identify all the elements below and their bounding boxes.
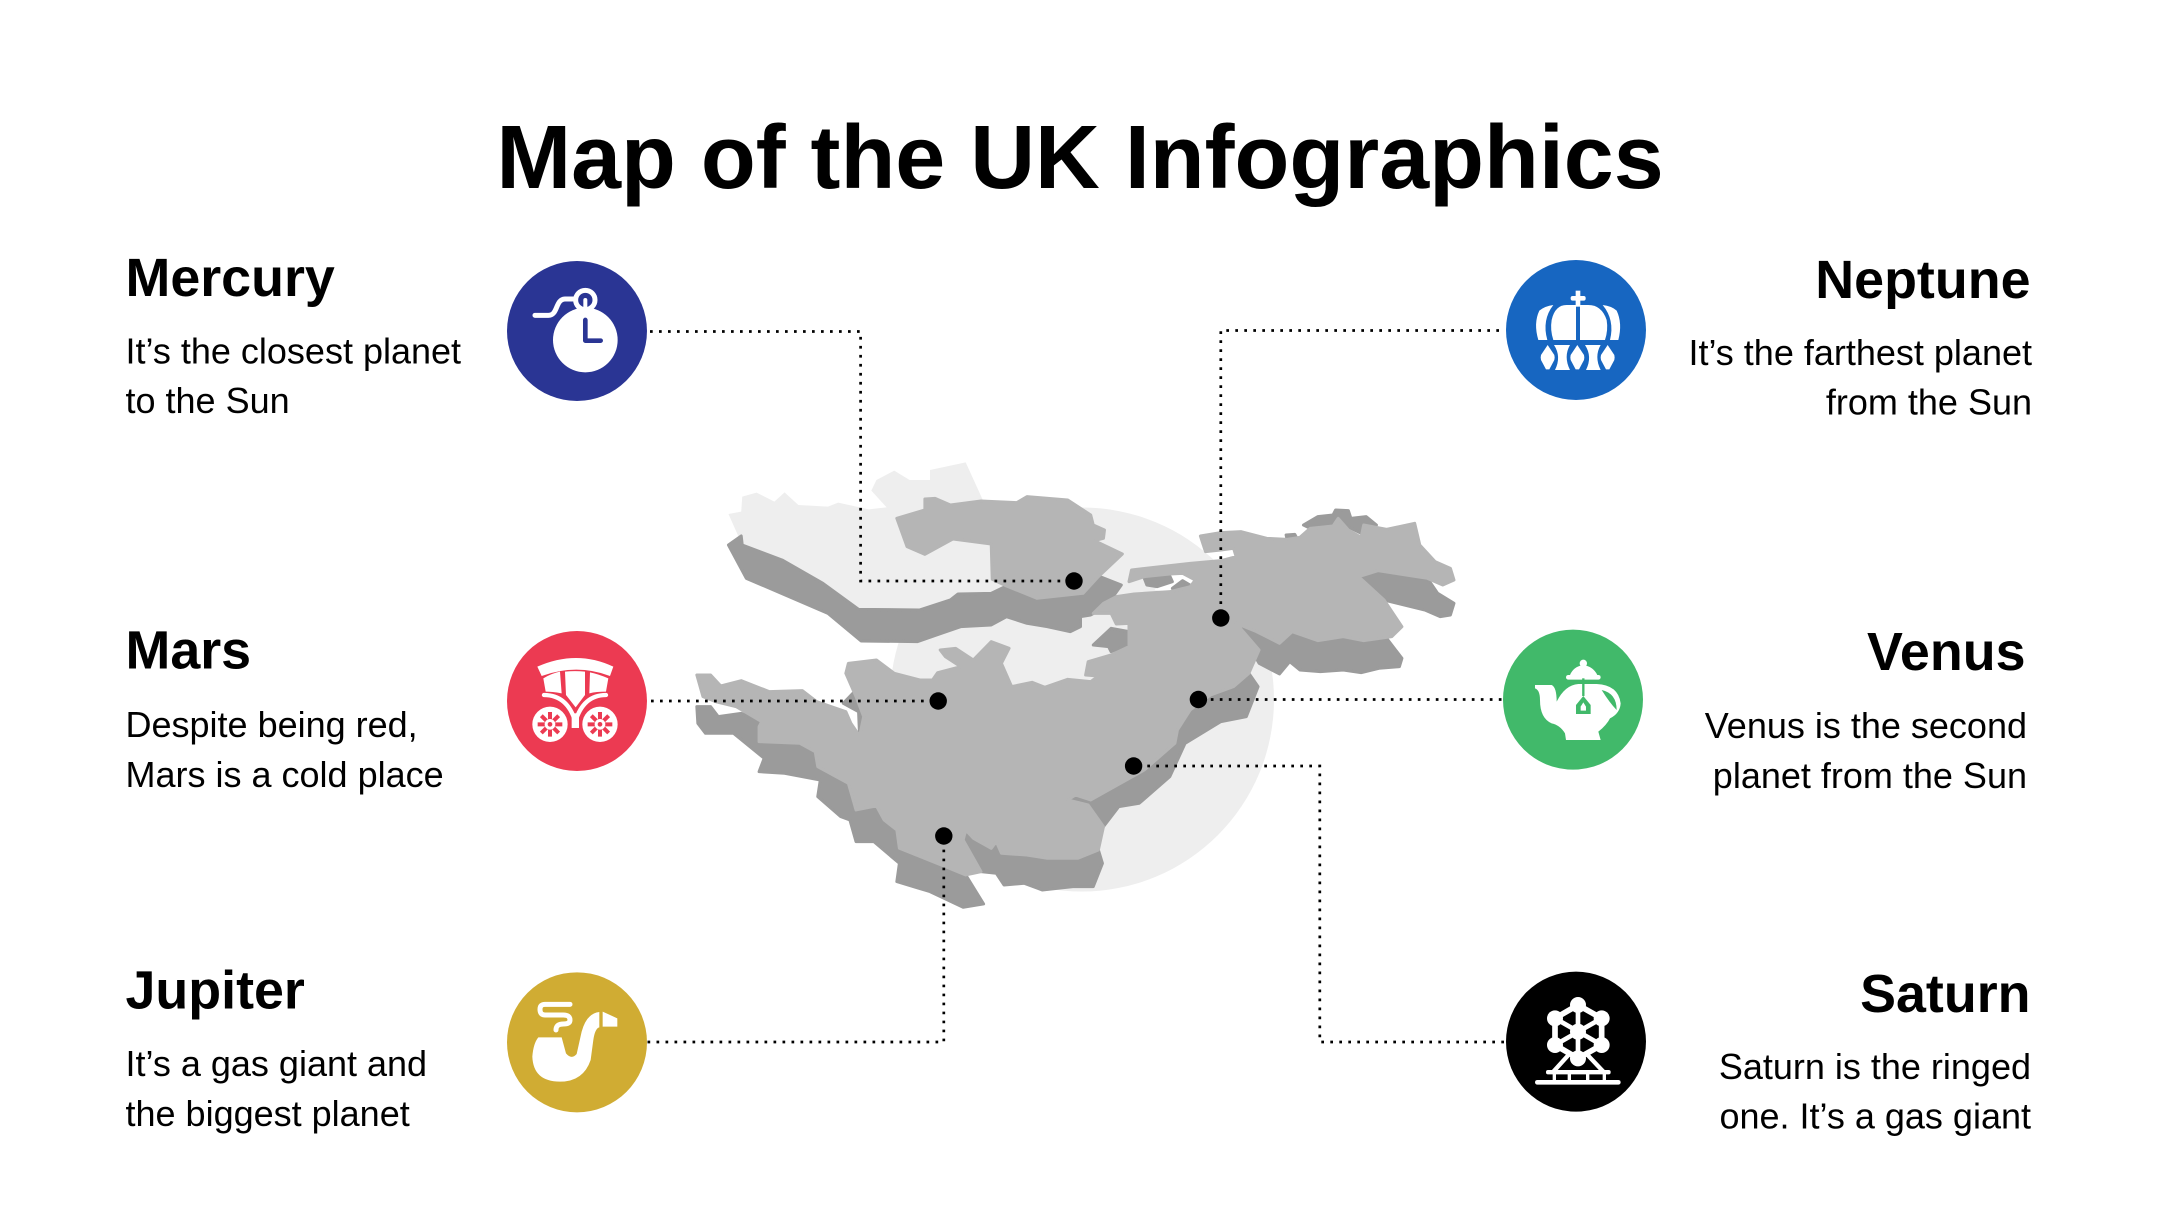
map marker dots: [930, 572, 1230, 845]
icon: teapot: [1503, 630, 1643, 770]
text: Neptune description: from the Sun: [1826, 382, 2032, 422]
heading: Mercury: Mercury: [126, 248, 335, 308]
icon: pocket watch: [507, 261, 647, 401]
panel: Mercury: [126, 248, 461, 421]
connector: Jupiter: [648, 836, 944, 1042]
heading: Mars: Mars: [126, 620, 251, 680]
text: Jupiter description: It’s a gas giant and: [126, 1043, 427, 1084]
heading: Jupiter: Jupiter: [126, 960, 305, 1020]
text: Mercury description: to the Sun: [126, 380, 290, 421]
text: Mercury description: It’s the closest planet: [126, 330, 461, 372]
connector: Venus: [1198, 698, 1502, 701]
title: Map of the UK Infographics: [496, 108, 1664, 208]
text: Saturn description: Saturn is the ringed: [1719, 1046, 2031, 1087]
text: Neptune description: It’s the farthest planet: [1688, 332, 2032, 373]
panel: Neptune: [1688, 250, 2032, 422]
icon: ferris wheel: [1506, 972, 1646, 1112]
heading: Venus: Venus: [1867, 622, 2026, 682]
text: Mars description: Despite being red,: [126, 704, 418, 745]
text: Venus description: planet from the Sun: [1713, 755, 2027, 796]
connector: Saturn: [1134, 766, 1504, 1042]
connector: Mars: [651, 700, 938, 702]
text: Mars description: Mars is a cold place: [126, 754, 444, 795]
heading: Neptune: Neptune: [1815, 250, 2030, 310]
connector: Mercury: [650, 332, 1074, 581]
panel: Venus: [1705, 622, 2027, 796]
panel: Mars: [126, 620, 444, 795]
text: Venus description: Venus is the second: [1705, 705, 2027, 746]
icon: smoking pipe: [507, 972, 647, 1112]
text: Saturn description: one. It’s a gas giant: [1719, 1096, 2031, 1136]
heading: Saturn: Saturn: [1860, 964, 2030, 1024]
text: Jupiter description: the biggest planet: [126, 1093, 410, 1134]
icon: carriage: [507, 631, 647, 771]
icon: crown: [1506, 260, 1646, 400]
panel: Jupiter: [126, 960, 427, 1134]
connector: Neptune: [1221, 330, 1499, 618]
map shapes: [697, 462, 1454, 907]
map of the UK: [697, 462, 1454, 907]
map background circle: [890, 508, 1274, 892]
panel: Saturn: [1719, 964, 2031, 1136]
